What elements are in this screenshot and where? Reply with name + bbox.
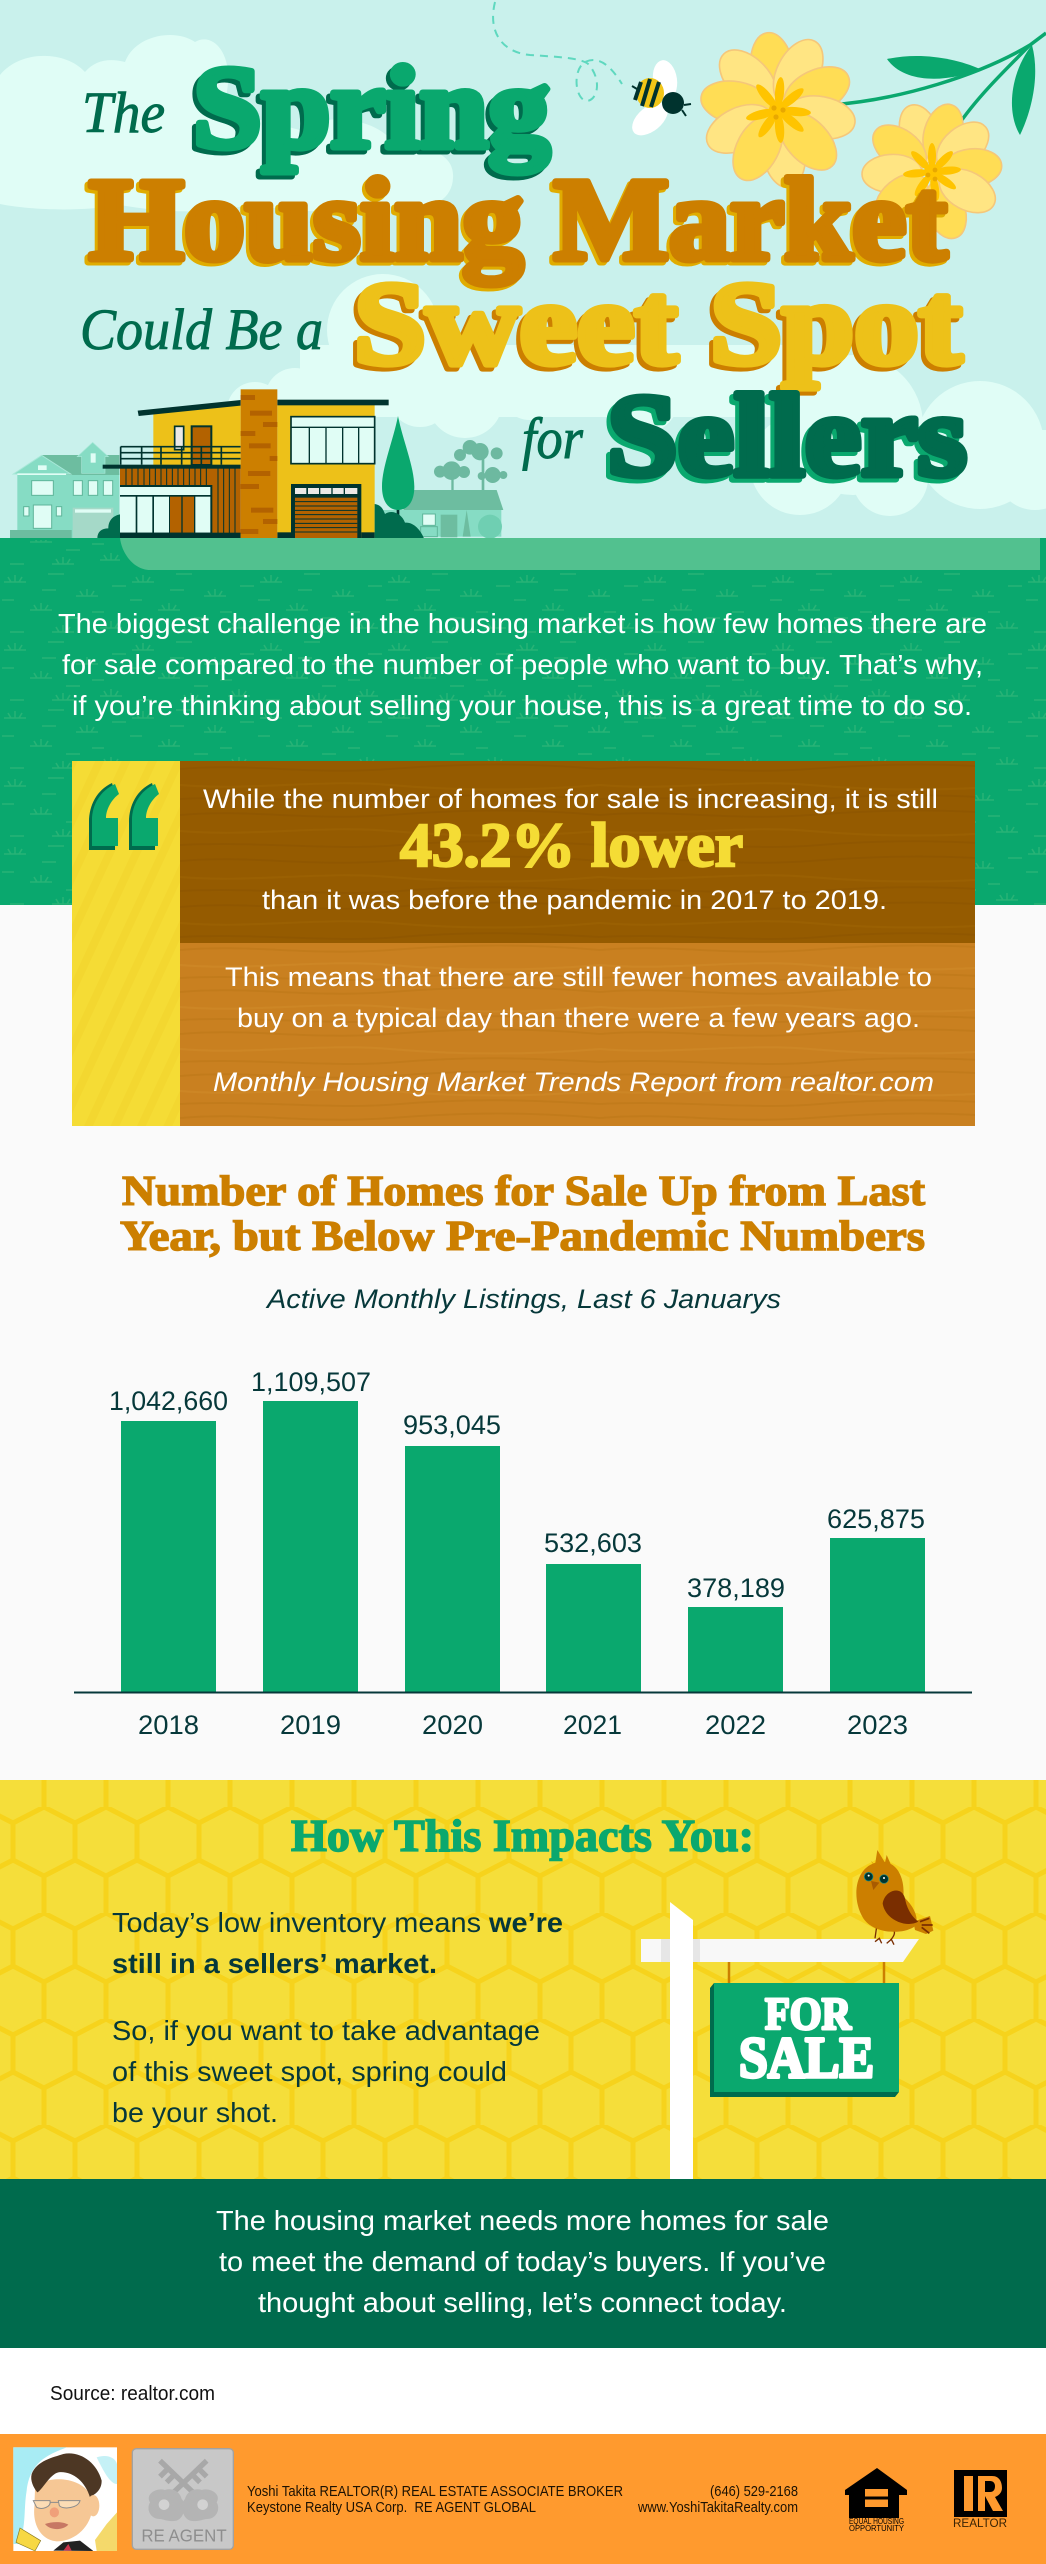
shrubs — [97, 504, 424, 538]
bar 2023: 625,875 — [827, 1504, 925, 1534]
chart heading: Year, but Below Pre-Pandemic Numbers — [120, 1214, 925, 1260]
RE Agent logo — [132, 2449, 233, 2549]
hero panel — [0, 0, 1046, 540]
house illustrations — [10, 389, 507, 539]
dark wood panel: While the number of homes for sale is increasing, it is still — [203, 784, 938, 814]
intro paragraph: for sale compared to the number of people who want to buy. That’s why, — [62, 649, 983, 680]
RE Agent logo: RE AGENT — [141, 2526, 227, 2546]
title: Sellers: Sellers — [607, 370, 967, 501]
impacts text: be your shot. — [112, 2097, 278, 2128]
agent details: Keystone Realty USA Corp. RE AGENT GLOBAL — [247, 2499, 536, 2516]
bar chart — [74, 1367, 972, 1740]
dark wood panel — [180, 761, 975, 943]
title: Housing Market: Housing Market — [89, 154, 947, 285]
impacts text: So, if you want to take advantage — [112, 2015, 540, 2046]
stem and leaves — [830, 33, 1046, 135]
bar 2021: 2021 — [563, 1710, 622, 1740]
panel: chart — [74, 1169, 972, 1740]
panel: call to action: to meet the demand of today’s buyers. If you’ve — [219, 2246, 826, 2277]
icon: equal housing opportunity: OPPORTUNITY — [849, 2524, 905, 2533]
impacts text: still in a sellers’ market. — [112, 1948, 437, 1979]
bird — [856, 1850, 933, 1945]
impacts text: of this sweet spot, spring could — [112, 2056, 507, 2087]
main house — [103, 389, 414, 538]
impacts text: Today’s low inventory means we’re — [112, 1907, 563, 1938]
light wood panel: This means that there are still fewer homes available to — [225, 962, 932, 992]
sky — [0, 0, 1046, 540]
icon: realtor logo: REALTOR — [953, 2516, 1007, 2530]
dark wood panel: than it was before the pandemic in 2017 to 2019. — [262, 885, 887, 915]
panel: call to action — [0, 2179, 1046, 2348]
title: Could Be a: Could Be a — [80, 297, 323, 362]
agent details: Yoshi Takita REALTOR(R) REAL ESTATE ASSOCIATE BROKER — [247, 2483, 623, 2500]
agent caricature — [13, 2447, 117, 2551]
quote yellow strip — [72, 761, 180, 1126]
bee flight path — [493, 2, 622, 101]
icon: equal housing opportunity — [845, 2468, 907, 2533]
bar 2020 — [403, 1410, 501, 1740]
chart heading: Number of Homes for Sale Up from Last — [122, 1169, 925, 1215]
bar 2018 — [109, 1386, 228, 1740]
background house right — [375, 440, 507, 539]
for sale sign: FOR — [765, 1988, 852, 2039]
intro paragraph: The biggest challenge in the housing market is how few homes there are — [58, 608, 987, 639]
bar 2018: 1,042,660 — [109, 1386, 228, 1416]
quote attribution: Monthly Housing Market Trends Report from realtor.com — [213, 1067, 934, 1097]
chart axis — [74, 1692, 972, 1694]
bar 2019 — [251, 1367, 371, 1740]
source panel — [0, 2348, 1046, 2434]
flower 2 — [861, 99, 1004, 244]
impacts text — [112, 1907, 563, 2128]
bee — [626, 59, 691, 142]
bar 2019: 2019 — [280, 1710, 341, 1740]
panel: call to action: thought about selling, let’s connect today. — [258, 2287, 787, 2318]
bar 2018: 2018 — [138, 1710, 199, 1740]
agent contact: (646) 529-2168 — [710, 2483, 798, 2500]
source panel: Source: realtor.com — [50, 2383, 215, 2405]
intro paragraph — [58, 608, 987, 721]
green grass section — [0, 538, 1046, 905]
title — [80, 42, 967, 501]
bar 2020: 953,045 — [403, 1410, 501, 1440]
flower 1 — [698, 30, 858, 190]
chart subtitle: Active Monthly Listings, Last 6 Januarys — [265, 1284, 781, 1314]
bar 2019: 1,109,507 — [251, 1367, 371, 1397]
panel: how this impacts you — [0, 1780, 1046, 2179]
bar 2021 — [544, 1528, 642, 1740]
icon: realtor logo — [953, 2470, 1007, 2530]
light wood panel: buy on a typical day than there were a few years ago. — [237, 1003, 920, 1033]
background house left — [10, 442, 119, 538]
panel: call to action: The housing market needs more homes for sale — [216, 2205, 829, 2236]
agent details — [247, 2483, 623, 2516]
bar 2022 — [687, 1573, 785, 1740]
stat: 43.2% lower: 43.2% lower — [400, 812, 743, 880]
bar 2023: 2023 — [847, 1710, 908, 1740]
impacts heading: How This Impacts You: — [291, 1811, 754, 1861]
bar 2020: 2020 — [422, 1710, 483, 1740]
title: for: for — [522, 406, 583, 471]
pale lawn bar — [120, 538, 1040, 570]
bar 2022: 2022 — [705, 1710, 766, 1740]
panel: quote — [72, 761, 975, 1126]
icon: quotation marks — [89, 783, 159, 850]
chart heading — [120, 1169, 925, 1260]
icon: equal housing opportunity: EQUAL HOUSING — [849, 2517, 904, 2526]
intro paragraph: if you’re thinking about selling your house, this is a great time to do so. — [72, 690, 972, 721]
clouds — [0, 35, 1046, 516]
bar 2022: 378,189 — [687, 1573, 785, 1603]
agent contact — [637, 2483, 798, 2516]
panel: footer — [0, 2434, 1046, 2564]
title: The: The — [82, 80, 165, 145]
agent contact: www.YoshiTakitaRealty.com — [637, 2499, 798, 2516]
for sale sign — [641, 1902, 919, 2179]
title: Spring: Spring — [193, 42, 550, 173]
light wood panel — [180, 943, 975, 1126]
bar 2023 — [827, 1504, 925, 1740]
title: Sweet Spot: Sweet Spot — [354, 258, 962, 389]
bar 2021: 532,603 — [544, 1528, 642, 1558]
for sale sign: SALE — [739, 2025, 874, 2090]
